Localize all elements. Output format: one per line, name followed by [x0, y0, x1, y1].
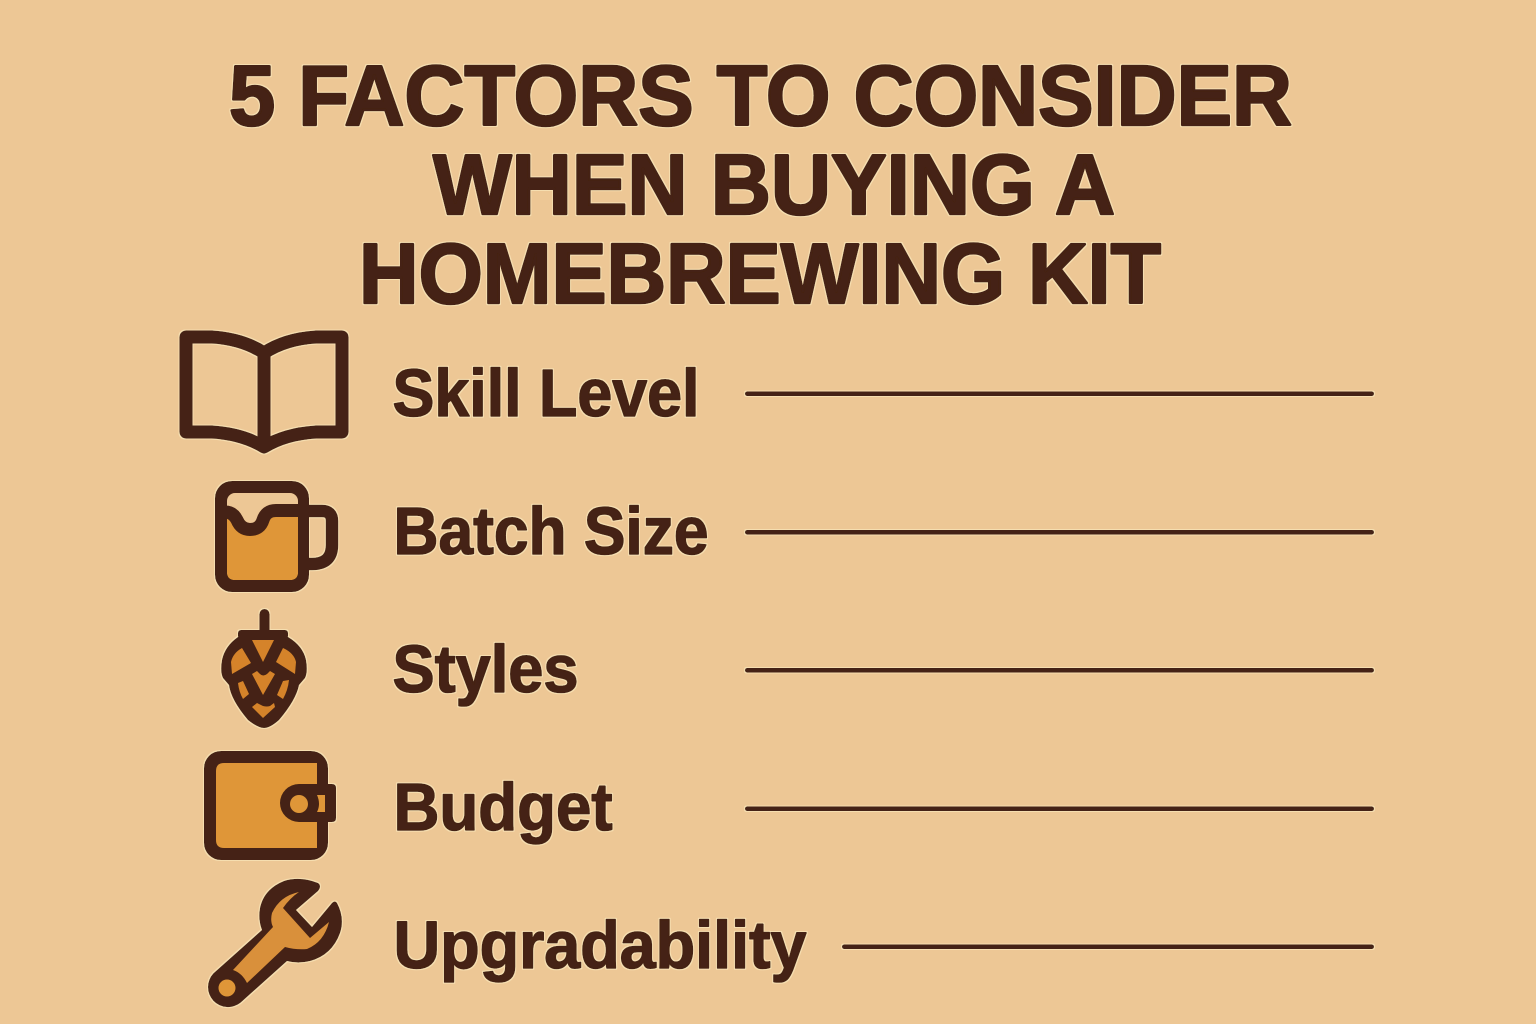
icon: wrench [208, 879, 342, 1007]
label: Batch Size: Batch Size [394, 494, 708, 569]
icon: beer mug [215, 481, 332, 592]
label: Budget: Budget [394, 770, 612, 845]
title: WHEN BUYING A [433, 138, 1115, 233]
label: Styles: Styles [392, 632, 578, 707]
icon: open book [186, 337, 342, 447]
icon: hop cone [221, 609, 307, 728]
infographic content [186, 49, 1374, 1007]
title: 5 FACTORS TO CONSIDER [229, 49, 1292, 144]
icon: wallet [204, 751, 336, 860]
line: Styles [745, 668, 1374, 672]
label: Skill Level: Skill Level [392, 356, 700, 431]
title: HOMEBREWING KIT [359, 227, 1161, 322]
line: Batch Size [745, 530, 1374, 534]
title [229, 49, 1292, 322]
line: Upgradability [842, 944, 1374, 949]
label: Upgradability: Upgradability [394, 908, 806, 983]
line: Budget [745, 806, 1374, 811]
line: Skill Level [745, 392, 1374, 396]
